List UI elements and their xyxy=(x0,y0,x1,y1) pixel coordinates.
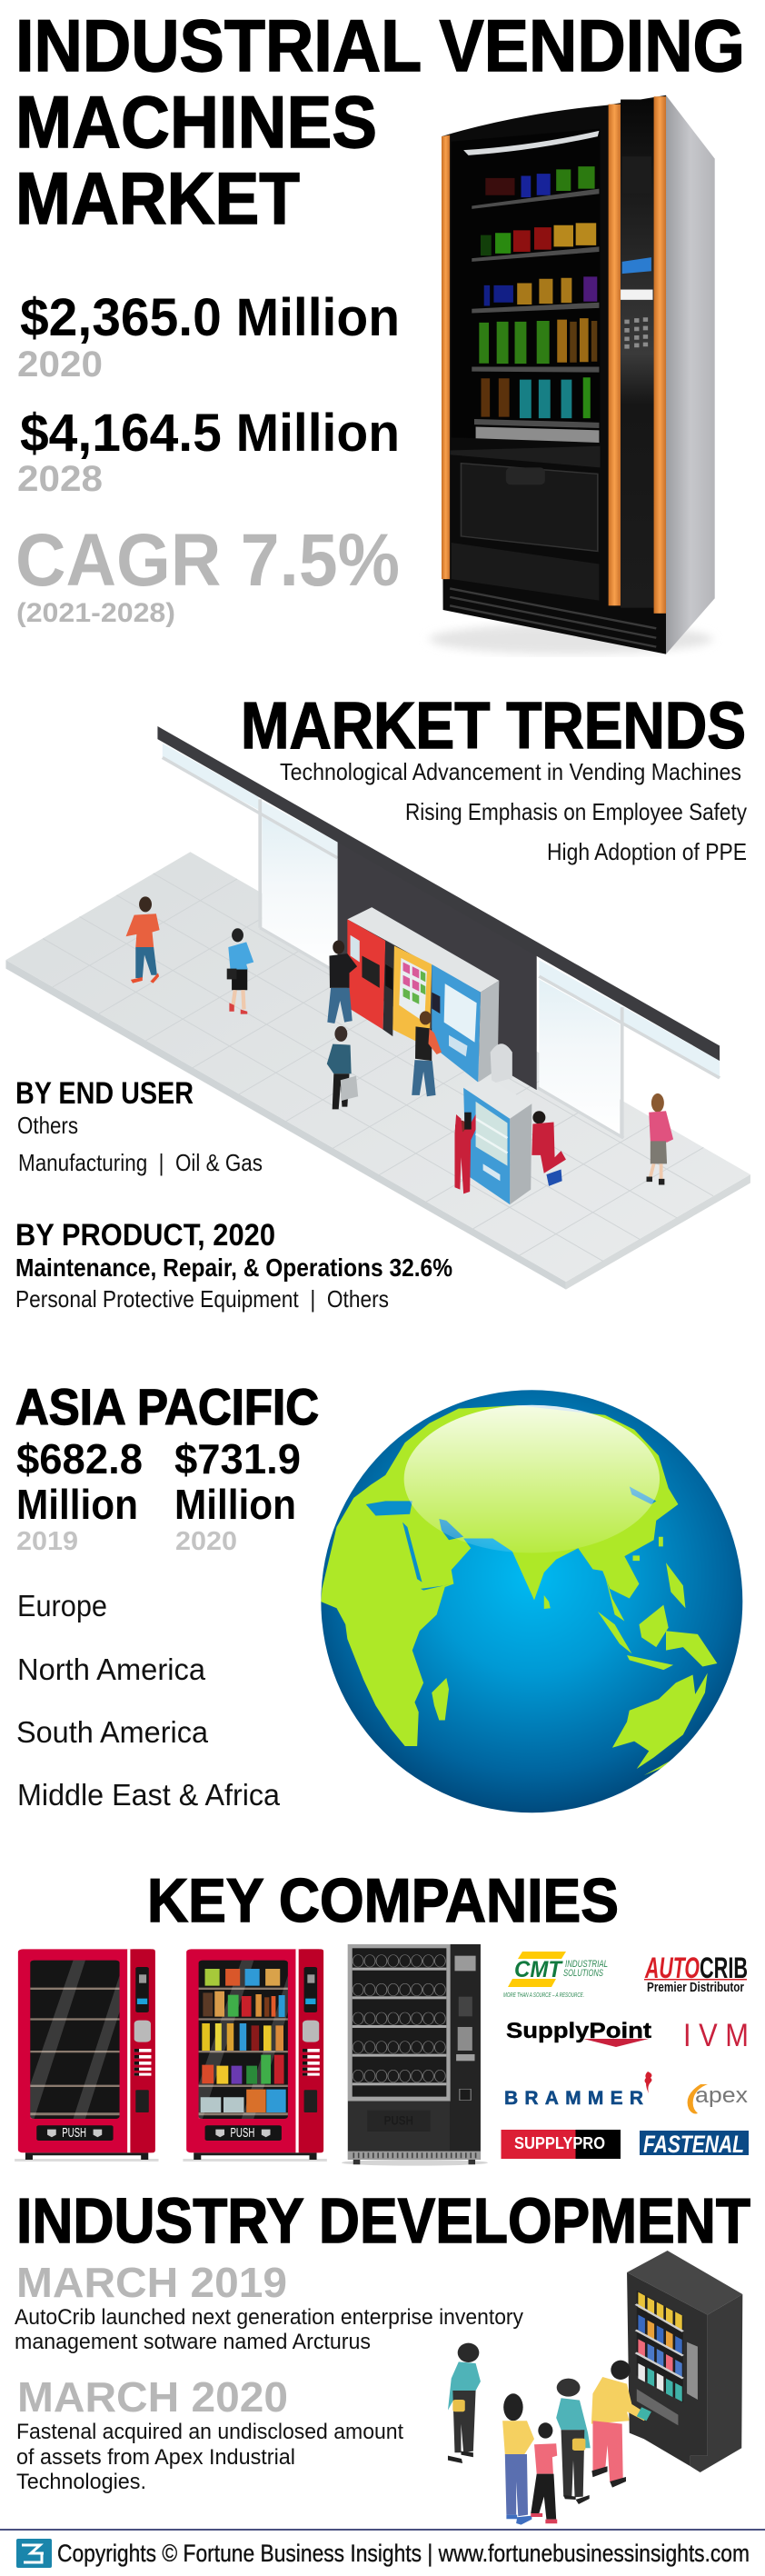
illustration: empty red vending machine xyxy=(15,1949,159,2162)
woman in yellow top xyxy=(502,2393,534,2525)
by product: BY PRODUCT, 2020 xyxy=(15,1218,275,1253)
person: man in vest xyxy=(412,1011,442,1096)
illustration: black vending machine: PUSH xyxy=(384,2113,413,2127)
service machine xyxy=(463,1078,532,1204)
march 2020 development xyxy=(16,2373,403,2494)
illustration: people queuing at vending machine xyxy=(448,2251,742,2525)
march 2019 development: MARCH 2019 xyxy=(16,2259,287,2306)
logo: AutoCrib xyxy=(644,1952,748,1995)
by product: Personal Protective Equipment | Others xyxy=(15,1285,389,1313)
woman with bag xyxy=(556,2379,591,2504)
logo: SupplyPro: SUPPLYPRO xyxy=(514,2134,605,2152)
march 2020 development: MARCH 2020 xyxy=(17,2373,288,2421)
march 2019 development: AutoCrib launched next generation enterprise inventory xyxy=(15,2305,523,2330)
regions list: Europe xyxy=(17,1589,107,1622)
glass windows xyxy=(163,744,720,1138)
woman with ponytail xyxy=(448,2343,481,2463)
market trends list xyxy=(280,758,747,865)
floor xyxy=(5,852,750,1290)
regions list: South America xyxy=(16,1715,209,1749)
title: MARKET xyxy=(15,158,300,240)
logo: CMT Industrial Solutions: MORE THAN A SOURCE – A RESOURCE. xyxy=(503,1992,584,1999)
market size figures: $2,365.0 Million xyxy=(20,288,400,347)
asia pacific 2019 value: 2019 xyxy=(16,1527,78,1556)
illustration: vending machine xyxy=(430,95,715,654)
asia pacific heading: ASIA PACIFIC xyxy=(15,1378,319,1435)
march 2019 development xyxy=(15,2259,523,2354)
illustration: stocked red vending machine xyxy=(183,1949,327,2162)
person: worker standing xyxy=(454,1113,476,1193)
roof beam xyxy=(157,726,720,1061)
illustration: isometric station with vending machines and people xyxy=(5,726,750,1290)
logo: CMT Industrial Solutions xyxy=(503,1952,608,1999)
person: orange shirt xyxy=(126,896,160,983)
footer rule xyxy=(0,2529,765,2531)
asia pacific 2019 value: $682.8 xyxy=(16,1435,143,1483)
logo: CMT Industrial Solutions: SOLUTIONS xyxy=(563,1968,603,1979)
person: blue shirt woman xyxy=(227,928,253,1014)
by product: Maintenance, Repair, & Operations 32.6% xyxy=(15,1253,452,1282)
march 2020 development: of assets from Apex Industrial xyxy=(16,2445,295,2470)
market size figures: 2020 xyxy=(17,344,103,384)
market size figures: $4,164.5 Million xyxy=(20,404,400,463)
asia pacific 2019 value: Million xyxy=(16,1481,138,1528)
CAGR: CAGR 7.5% xyxy=(15,519,400,602)
logo: SupplyPoint: SupplyPoint xyxy=(506,2019,651,2043)
by end user xyxy=(15,1076,263,1176)
asia pacific 2020 value xyxy=(174,1435,301,1556)
title xyxy=(15,5,745,240)
asia pacific 2020 value: $731.9 xyxy=(174,1435,301,1483)
logo: CMT Industrial Solutions: INDUSTRIAL xyxy=(565,1959,608,1970)
wall xyxy=(338,838,537,1090)
logo: IVM: I V M xyxy=(683,2018,749,2053)
asia pacific 2020 value: Million xyxy=(174,1481,296,1528)
stocked machine push label and products: PUSH xyxy=(230,2125,254,2141)
by end user: BY END USER xyxy=(15,1076,194,1111)
globe xyxy=(321,1390,742,1812)
regions list: Middle East & Africa xyxy=(17,1778,281,1812)
by end user: Manufacturing | Oil & Gas xyxy=(18,1149,263,1176)
logo: Apex: apex xyxy=(695,2083,748,2108)
march 2019 development: management sotware named Arcturus xyxy=(15,2330,371,2354)
illustration: empty red vending machine: PUSH xyxy=(62,2125,86,2141)
market size figures xyxy=(17,288,400,499)
by end user: Others xyxy=(17,1112,78,1139)
logo: SupplyPro xyxy=(502,2130,621,2159)
logo: Apex xyxy=(688,2083,748,2113)
person: pink top woman xyxy=(647,1093,673,1184)
logo: CMT Industrial Solutions: CMT xyxy=(514,1957,564,1982)
logo: AutoCrib: AUTO xyxy=(644,1952,700,1984)
person: woman with shopping bag xyxy=(327,1026,358,1109)
asia pacific 2020 value: 2020 xyxy=(175,1527,237,1556)
trash bin xyxy=(491,1043,512,1083)
market size figures: 2028 xyxy=(17,459,103,499)
child xyxy=(531,2422,557,2523)
march 2020 development: Fastenal acquired an undisclosed amount xyxy=(16,2420,403,2444)
regions list xyxy=(16,1589,281,1812)
CAGR: (2021-2028) xyxy=(16,598,175,628)
logo: Brammer: BRAMMER xyxy=(504,2088,643,2109)
person: man at red machine xyxy=(327,940,357,1023)
person: worker kneeling xyxy=(532,1111,566,1186)
logo: Brammer xyxy=(504,2072,652,2109)
key companies heading: KEY COMPANIES xyxy=(147,1866,619,1935)
dark vending machine xyxy=(627,2251,742,2472)
man buying xyxy=(591,2361,651,2488)
asia pacific 2019 value xyxy=(16,1435,143,1556)
title: MACHINES xyxy=(15,82,377,164)
march 2020 development: Technologies. xyxy=(16,2470,146,2494)
stocked machine push label and products xyxy=(201,1969,286,2141)
by product xyxy=(15,1218,452,1313)
regions list: North America xyxy=(17,1652,206,1686)
illustration: black vending machine xyxy=(342,1944,488,2166)
vending machines row xyxy=(347,907,499,1083)
footer logo xyxy=(16,2539,52,2568)
